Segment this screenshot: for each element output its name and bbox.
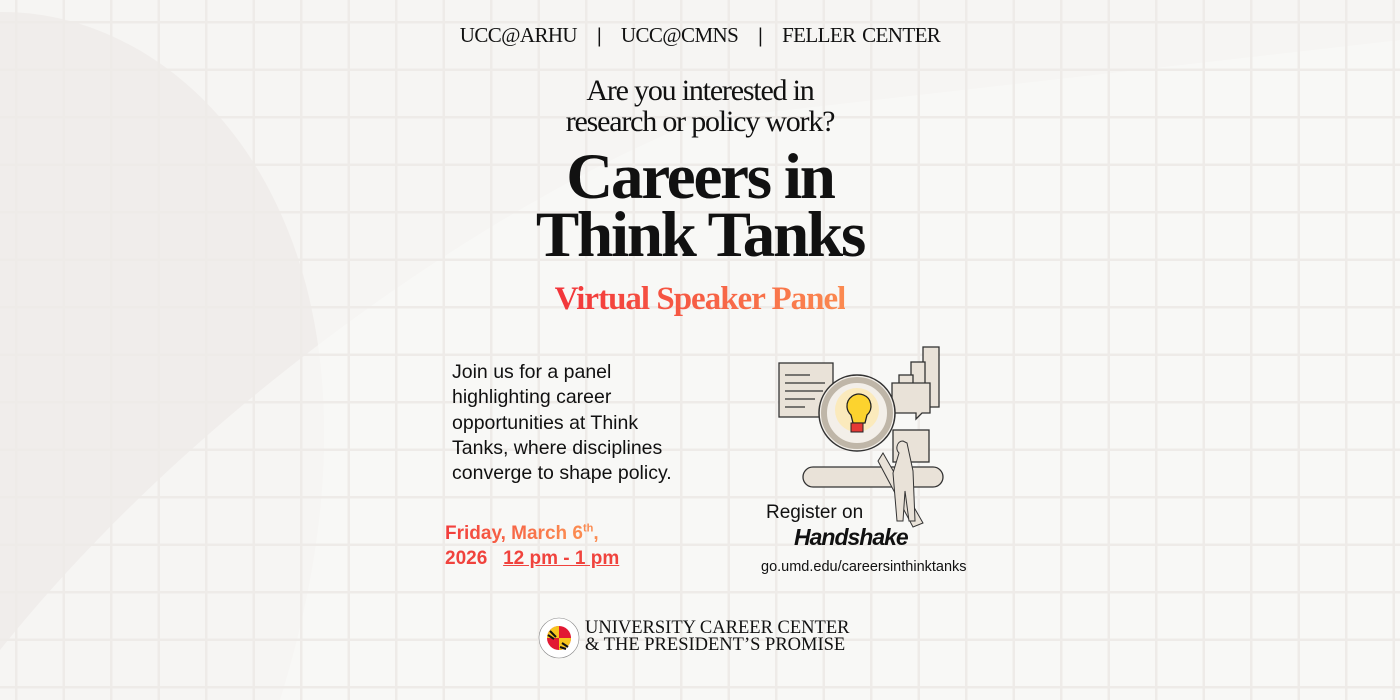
- subtitle: virtual speaker panel: Virtual Speaker Panel: [555, 281, 845, 317]
- title: Think Tanks: [536, 199, 864, 271]
- registration url: go.umd.edu/careersinthinktanks: [761, 559, 967, 575]
- title: Careers in: [566, 141, 834, 213]
- illustration: magnifier with lightbulb: [778, 346, 944, 528]
- text: career center name: [585, 618, 850, 655]
- text: career center name: UNIVERSITY CAREER CENTER: [585, 618, 849, 638]
- subheading question: research or policy work?: [566, 105, 834, 138]
- subheading question: [566, 74, 834, 138]
- description text: Join us for a panel highlighting career opportunities at Think Tanks, where disciplines converge to shape policy.: [452, 361, 672, 484]
- event date and time: Friday, March 6th,: [445, 523, 599, 544]
- header: partner offices: UCC@ARHU | UCC@CMNS | FELLER CENTER: [460, 23, 940, 47]
- footer logo: university career center: [538, 618, 850, 658]
- register on handshake: Register on: [766, 502, 863, 523]
- icon: umd seal: [538, 618, 580, 658]
- event date and time: [445, 523, 620, 569]
- title: [536, 141, 865, 271]
- subheading question: Are you interested in: [586, 74, 814, 107]
- event date and time: 2026 12 pm - 1 pm: [445, 548, 619, 569]
- text: career center name: & THE PRESIDENT’S PROMISE: [585, 635, 845, 655]
- text: Handshake: [794, 524, 908, 550]
